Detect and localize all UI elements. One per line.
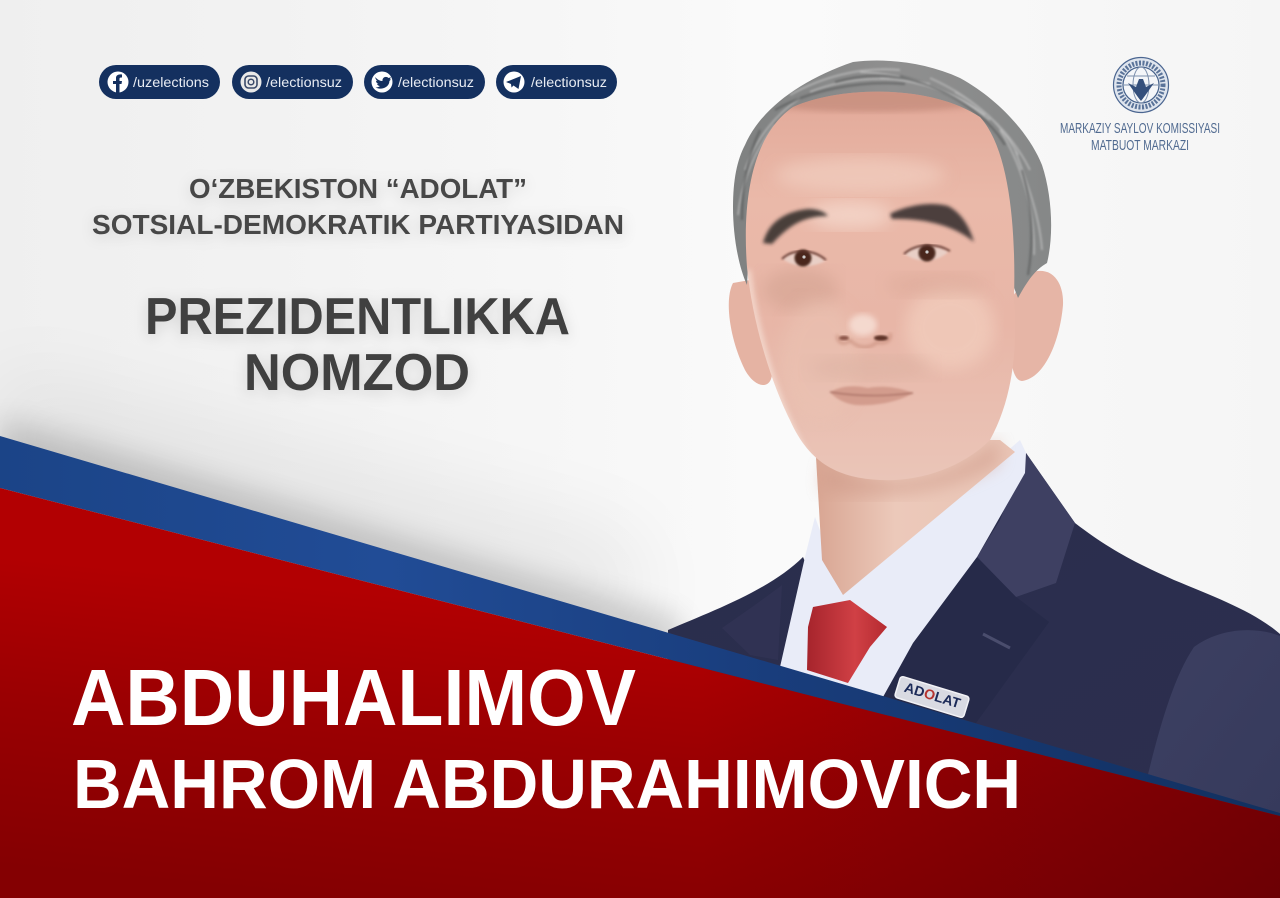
nose — [837, 314, 890, 347]
left eye — [782, 250, 826, 266]
pill: twitter: /electionsuz — [398, 75, 474, 90]
ear: left — [729, 280, 772, 385]
right eye — [904, 244, 950, 262]
party heading: SOTSIAL-DEMOKRATIK PARTIYASIDAN — [92, 209, 624, 240]
pill: instagram: /electionsuz — [266, 75, 342, 90]
jacket — [668, 453, 1280, 830]
title: presidential candidate: PREZIDENTLIKKA — [145, 288, 570, 346]
right eyebrow — [890, 204, 974, 242]
pill: telegram — [496, 65, 617, 99]
pill: facebook — [99, 65, 220, 99]
title: presidential candidate: NOMZOD — [244, 344, 470, 402]
portrait — [668, 61, 1280, 830]
lapel badge: ADOLAT — [894, 676, 970, 718]
tie — [807, 600, 887, 683]
commission name — [1060, 120, 1220, 154]
blue band — [0, 436, 1280, 816]
lapel badge: ADOLAT: ADOLAT — [903, 679, 963, 711]
mouth — [830, 386, 913, 405]
commission name: MATBUOT MARKAZI — [1091, 137, 1189, 154]
neck — [815, 440, 1015, 595]
left eyebrow — [763, 209, 828, 244]
red panel — [0, 488, 1280, 898]
shirt — [780, 440, 1026, 697]
icon: commission emblem — [1114, 58, 1168, 112]
pill: facebook: /uzelections — [133, 75, 209, 90]
candidate name: ABDUHALIMOV — [71, 653, 636, 742]
candidate name — [71, 653, 1021, 823]
party heading: O‘ZBEKISTON “ADOLAT” — [189, 173, 527, 204]
face shading — [747, 88, 995, 470]
pill: twitter — [364, 65, 485, 99]
pill: telegram: /electionsuz — [531, 75, 607, 90]
neck shadow — [822, 438, 1000, 496]
band shadow — [0, 418, 680, 660]
face — [746, 92, 1015, 480]
social links — [99, 65, 617, 99]
ear: right — [1010, 271, 1063, 381]
candidate name: BAHROM ABDURAHIMOVICH — [73, 745, 1021, 823]
pill: instagram — [232, 65, 353, 99]
party heading — [92, 173, 624, 240]
lower background shade — [0, 370, 640, 640]
title: presidential candidate — [145, 288, 570, 402]
hair — [733, 61, 1051, 298]
